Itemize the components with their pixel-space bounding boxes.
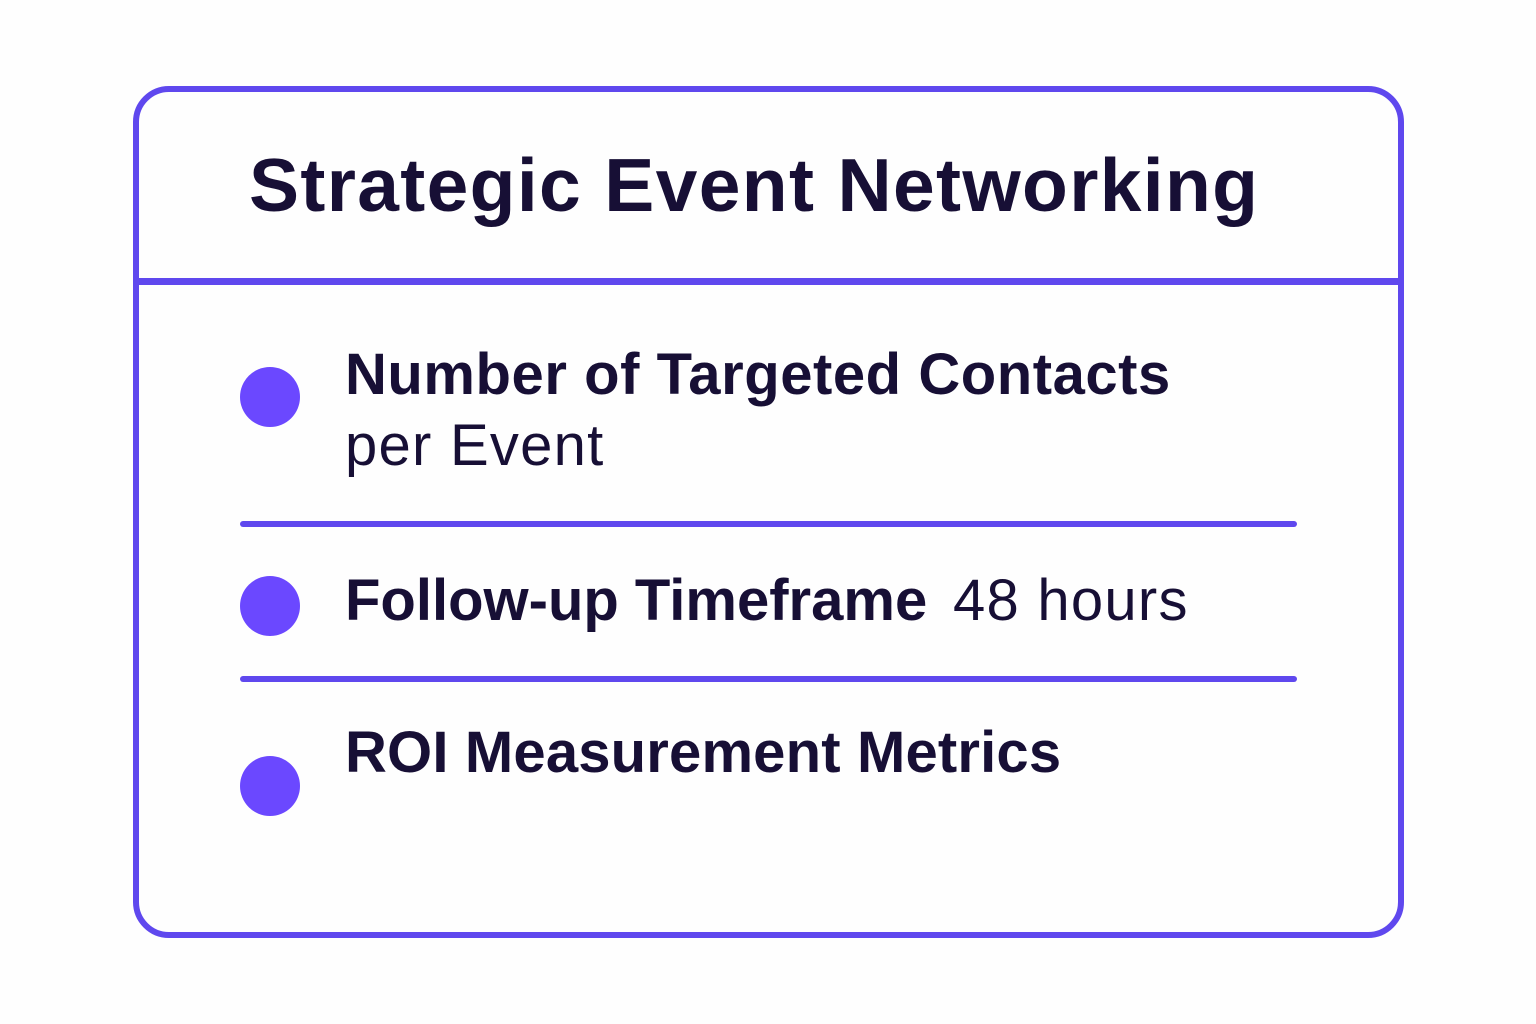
panel: card bbox=[133, 86, 1404, 938]
icon: bullet 2 bbox=[240, 576, 300, 636]
label: follow-up timeframe: Follow-up Timeframe bbox=[345, 568, 927, 633]
label: ROI measurement metrics: ROI Measurement Metrics bbox=[345, 720, 1061, 785]
icon: bullet 1 bbox=[240, 367, 300, 427]
value: per event: per Event bbox=[345, 413, 605, 478]
text: follow-up timeframe bbox=[345, 568, 1189, 633]
icon: bullet 3 bbox=[240, 756, 300, 816]
header divider bbox=[136, 278, 1401, 285]
divider 1 bbox=[240, 521, 1297, 527]
title: Strategic Event Networking bbox=[249, 143, 1259, 227]
label: targeted contacts: Number of Targeted Contacts bbox=[345, 342, 1171, 407]
divider 2 bbox=[240, 676, 1297, 682]
value: 48 hours: 48 hours bbox=[953, 568, 1189, 633]
text: targeted contacts bbox=[345, 342, 1171, 478]
